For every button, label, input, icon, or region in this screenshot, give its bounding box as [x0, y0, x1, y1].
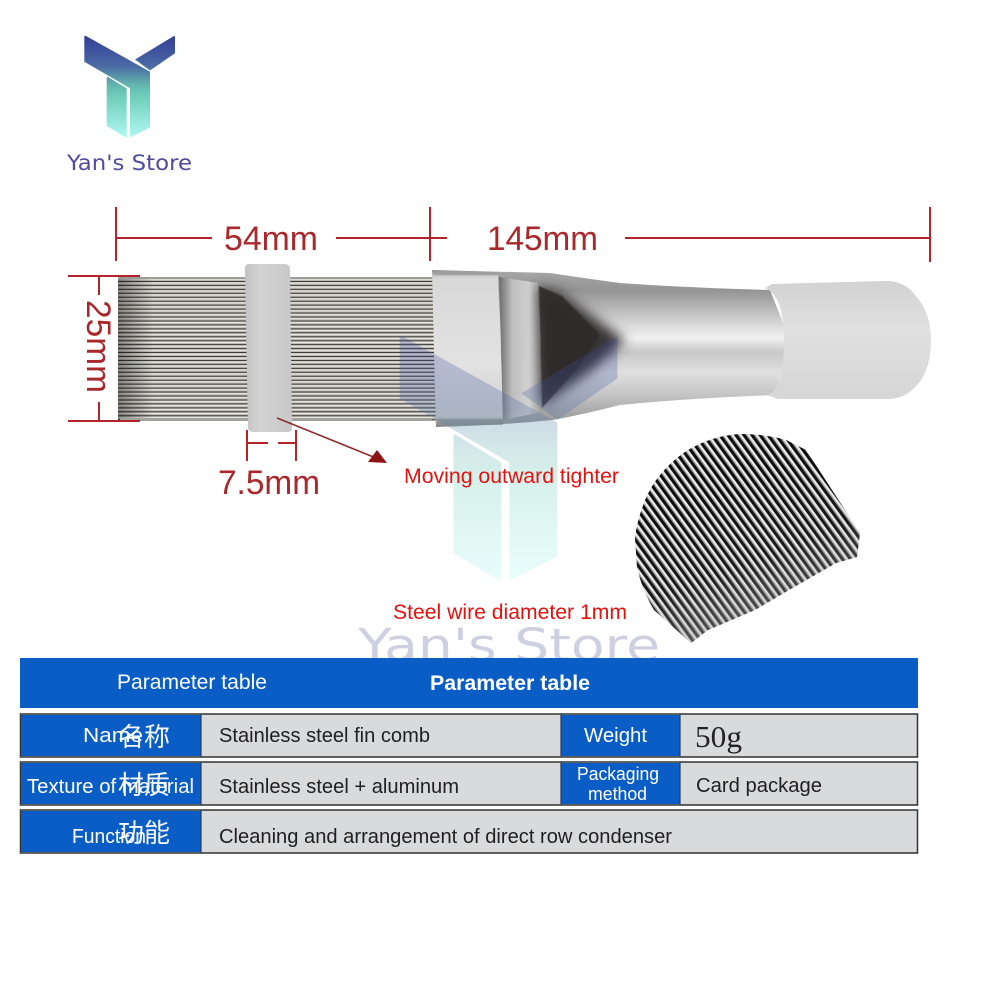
row: function: Cleaning and arrangement of direct row condenser — [219, 826, 672, 848]
row: material and packaging: Texture of material — [27, 776, 194, 798]
infographic canvas — [20, 36, 931, 854]
row: function: Function — [72, 826, 146, 848]
dimension: 54mm: 54mm — [224, 220, 318, 258]
row: name and weight — [20, 714, 918, 757]
row: material and packaging: Stainless steel + aluminum — [219, 776, 459, 798]
watermark wordmark: Yan's Store — [357, 619, 660, 672]
row: name and weight: Weight — [584, 725, 647, 747]
row: material and packaging — [20, 762, 918, 805]
logo: Yan's Store — [66, 36, 192, 175]
table header: Parameter table — [117, 670, 267, 694]
dimension: 145mm: 145mm — [487, 220, 598, 258]
comb slider — [245, 264, 292, 432]
row: name and weight: 50g — [695, 719, 742, 754]
row: material and packaging: Card package — [696, 775, 822, 797]
flat ferrule — [432, 270, 503, 427]
comb wires — [118, 277, 436, 421]
table header — [20, 658, 918, 708]
callout: steel wire diameter: Steel wire diameter 1mm — [393, 600, 627, 624]
dimension: 25mm: 25mm — [79, 300, 117, 393]
row: function — [20, 810, 918, 853]
row: name and weight: 名称 — [118, 722, 170, 752]
dimension: 145mm — [487, 207, 930, 262]
logo mark — [84, 36, 175, 137]
detail photo: wire tips close-up — [635, 434, 860, 643]
row: material and packaging: 材质 — [118, 770, 170, 800]
table header: Parameter table — [430, 671, 590, 695]
dimension: 7.5mm — [218, 430, 320, 502]
callout: moving outward tighter: Moving outward tighter — [404, 464, 619, 488]
handle cap — [765, 281, 931, 399]
arrow: slider direction — [277, 418, 387, 463]
dimension: 7.5mm: 7.5mm — [218, 464, 320, 502]
dimension: 25mm — [68, 276, 140, 421]
row: name and weight: Name — [83, 725, 143, 747]
row: function: 功能 — [118, 818, 170, 848]
dark pressed hollow — [538, 286, 625, 406]
parameter table — [20, 658, 918, 853]
handle body — [432, 270, 790, 427]
row: material and packaging: method — [588, 784, 647, 804]
row: name and weight: Stainless steel fin comb — [219, 725, 430, 747]
logo wordmark: Yan's Store — [66, 151, 192, 175]
dimension: 54mm — [116, 207, 447, 261]
row: material and packaging: Packaging — [577, 764, 659, 784]
pressed step — [499, 277, 542, 420]
watermark logo — [400, 336, 617, 580]
product: fin comb — [118, 264, 931, 432]
